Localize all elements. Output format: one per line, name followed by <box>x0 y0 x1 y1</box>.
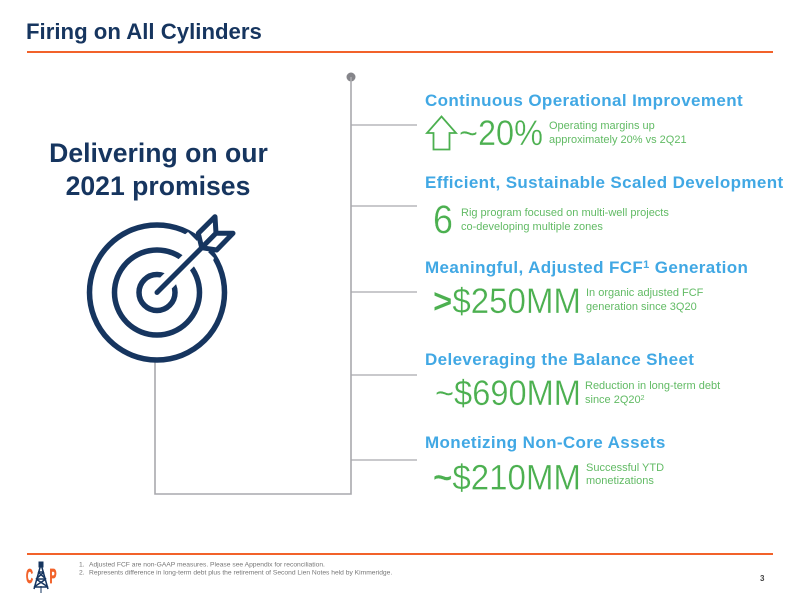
item: adjusted FCF generation: >$250MM <box>433 282 581 321</box>
item: adjusted FCF generation: Generation <box>650 258 748 277</box>
item: efficient scaled development: Rig program focused on multi-well projects <box>461 207 669 219</box>
item: deleveraging the balance sheet: Deleveraging the Balance Sheet <box>425 350 694 369</box>
item: monetizing non-core assets: Monetizing Non-Core Assets <box>425 433 666 452</box>
item: adjusted FCF generation: generation since 3Q20 <box>586 301 697 313</box>
item: monetizing non-core assets <box>425 433 666 498</box>
footnotes: Adjusted FCF are non-GAAP measures. Please see Appendix for reconciliation. <box>89 562 325 568</box>
subheading: delivering on our 2021 promises: 2021 promises <box>66 171 250 201</box>
footnotes: Represents difference in long-term debt plus the retirement of Second Lien Notes held by Kimmeridge. <box>89 570 392 576</box>
title: Firing on All Cylinders <box>26 19 262 44</box>
footnotes: 2. <box>79 570 85 576</box>
item: adjusted FCF generation <box>425 258 748 321</box>
item: adjusted FCF generation: 1 <box>643 259 650 271</box>
item: deleveraging the balance sheet: since 2Q20 <box>585 394 641 406</box>
item: continuous operational improvement: Operating margins up <box>549 120 655 132</box>
item: adjusted FCF generation: In organic adjusted FCF <box>586 287 704 299</box>
page number: 3 <box>760 574 765 583</box>
footnotes <box>79 562 392 576</box>
item: efficient scaled development: 6 <box>433 198 453 242</box>
item: deleveraging the balance sheet: ~$690MM <box>435 374 581 413</box>
item: deleveraging the balance sheet: Reduction in long-term debt <box>585 380 720 392</box>
icon: target with arrow <box>90 217 233 360</box>
item: continuous operational improvement: approximately 20% vs 2Q21 <box>549 134 687 146</box>
item: continuous operational improvement <box>425 91 743 153</box>
item: continuous operational improvement: Continuous Operational Improvement <box>425 91 743 110</box>
subheading: delivering on our 2021 promises: Delivering on our <box>49 138 268 168</box>
logo <box>26 562 56 593</box>
item: efficient scaled development <box>425 173 784 242</box>
item: deleveraging the balance sheet <box>425 350 720 413</box>
item: monetizing non-core assets: Successful YTD <box>586 462 664 474</box>
logo: C <box>26 566 33 588</box>
item: efficient scaled development: co-developing multiple zones <box>461 221 603 233</box>
item: monetizing non-core assets: ~$210MM <box>433 458 581 498</box>
timeline connector <box>155 72 417 494</box>
item: monetizing non-core assets: monetizations <box>586 475 654 487</box>
item: deleveraging the balance sheet: 2 <box>641 395 645 402</box>
logo: P <box>50 566 56 588</box>
item: efficient scaled development: Efficient, Sustainable Scaled Development <box>425 173 784 192</box>
footnotes: 1. <box>79 562 85 568</box>
item: continuous operational improvement: ~20% <box>459 114 543 153</box>
item: adjusted FCF generation: Meaningful, Adjusted FCF <box>425 258 643 277</box>
subheading: delivering on our 2021 promises <box>49 138 268 201</box>
